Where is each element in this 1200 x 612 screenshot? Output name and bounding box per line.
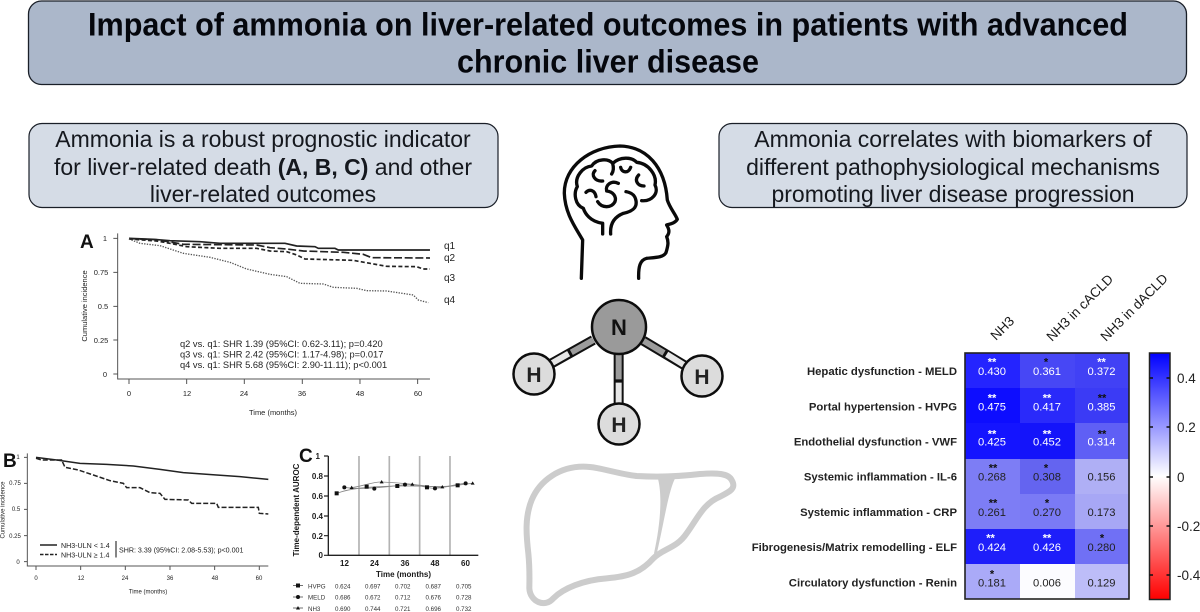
chart C axis labels: 0: [319, 551, 324, 560]
heatmap significance stars: **: [988, 356, 997, 368]
left subtitle box: [29, 124, 498, 208]
chart B tick labels: Time (months): [129, 590, 167, 596]
heatmap values: 0.430: [978, 366, 1006, 378]
hydrogen atom bottom: [598, 404, 640, 444]
left subtitle box: Ammonia is a robust prognostic indicator: [55, 126, 471, 152]
heatmap values: 0.314: [1088, 436, 1116, 448]
left subtitle box: liver-related outcomes: [150, 181, 376, 207]
heatmap significance stars: **: [986, 532, 995, 544]
chart B tick labels: 1: [16, 455, 20, 461]
heatmap row labels: Systemic inflammation - CRP: [800, 507, 957, 519]
panel letter B: B: [3, 451, 17, 472]
chart C axis labels: Time-dependent AUROC: [292, 463, 301, 556]
heatmap significance stars: [986, 356, 1107, 580]
chart C axis labels: Time (months): [376, 570, 431, 579]
right subtitle box: promoting liver disease progression: [771, 181, 1135, 207]
heatmap significance stars: *: [1045, 498, 1050, 510]
chart C data table: HVPG: [308, 584, 326, 590]
chart A tick labels: 60: [414, 389, 422, 398]
heatmap significance stars: *: [1100, 532, 1105, 544]
chart C data table: 0.712: [395, 594, 411, 602]
colour scale legend: 0.2: [1177, 420, 1196, 435]
chart A quartile labels: q2: [444, 253, 456, 264]
heatmap column headers: NH3 in cACLD: [1044, 271, 1116, 344]
heatmap significance stars: **: [1043, 428, 1052, 440]
heatmap values: 0.372: [1088, 366, 1116, 378]
chart A tick labels: 1: [103, 234, 107, 243]
chart C axes and time separators: [324, 456, 478, 555]
chart C axis labels: [292, 452, 470, 579]
heatmap values: 0.006: [1033, 578, 1061, 590]
colour scale legend: -0.2: [1177, 519, 1200, 534]
chart C axis labels: 24: [370, 559, 379, 568]
chart B legend: [40, 541, 243, 560]
chart B axes: [24, 453, 268, 570]
chart A tick labels: [80, 234, 422, 417]
chart B tick labels: 0.75: [9, 481, 21, 487]
chart A tick labels: Time (months): [249, 408, 298, 417]
chart B tick labels: 60: [256, 576, 263, 582]
heatmap values: [978, 366, 1116, 590]
heatmap row labels: Endothelial dysfunction - VWF: [794, 436, 957, 448]
chart A hazard ratios: q4 vs. q1: SHR 5.68 (95%CI: 2.90-11.11); p<0.001: [180, 360, 387, 370]
chart A tick labels: 24: [240, 389, 248, 398]
right subtitle box: different pathophysiological mechanisms: [746, 154, 1160, 180]
heatmap row labels: Hepatic dysfunction - MELD: [807, 366, 957, 378]
chart C axis labels: 0.4: [312, 512, 324, 521]
heatmap column headers: NH3 in dACLD: [1098, 271, 1171, 344]
chart B tick labels: 36: [167, 576, 174, 582]
heatmap values: 0.280: [1088, 542, 1116, 554]
chart B tick labels: 0.25: [9, 534, 21, 540]
heatmap row labels: Fibrogenesis/Matrix remodelling - ELF: [752, 542, 957, 554]
chart C data table: 0.676: [426, 594, 442, 602]
title banner: [28, 1, 1186, 84]
molecule bonds: [552, 340, 684, 404]
heatmap row labels: Circulatory dysfunction - Renin: [789, 577, 957, 589]
heatmap values: 0.129: [1088, 578, 1116, 590]
chart C axis labels: 0.8: [312, 472, 324, 481]
heatmap significance stars: **: [989, 462, 998, 474]
heatmap row labels: Systemic inflammation - IL-6: [804, 472, 957, 484]
chart A tick labels: Cumulative incidence: [80, 270, 89, 342]
right subtitle box: [719, 124, 1187, 208]
heatmap values: 0.426: [1033, 542, 1061, 554]
heatmap border: [965, 353, 1129, 599]
chart A tick labels: 0: [103, 370, 107, 379]
chart A hazard ratios: q3 vs. q1: SHR 2.42 (95%CI: 1.17-4.98); p=0.017: [180, 350, 383, 360]
chart B tick labels: 24: [122, 576, 129, 582]
chart A tick labels: 36: [298, 389, 306, 398]
heatmap significance stars: **: [1043, 392, 1052, 404]
panel letter C: C: [299, 446, 313, 467]
chart C axis labels: 60: [461, 559, 470, 568]
hydrogen atom right: [682, 356, 722, 396]
chart C axis labels: 0.6: [312, 492, 324, 501]
heatmap: ammonia correlations: [752, 271, 1171, 599]
chart C data table: 0.672: [365, 594, 381, 602]
colour scale legend: 0.4: [1177, 371, 1196, 386]
icon: liver outline: [527, 467, 733, 603]
heatmap cells: [965, 353, 1129, 599]
heatmap values: 0.270: [1033, 507, 1061, 519]
chart B legend: SHR: 3.39 (95%CI: 2.08-5.53); p<0.001: [119, 546, 243, 554]
heatmap significance stars: **: [1097, 356, 1106, 368]
heatmap values: 0.385: [1088, 402, 1116, 414]
chart B tick labels: 0.5: [12, 507, 21, 513]
panel letter A: A: [80, 232, 94, 253]
hydrogen atom right: H: [694, 366, 710, 389]
chart A quartile labels: [444, 241, 456, 306]
chart A tick labels: 12: [183, 389, 191, 398]
heatmap significance stars: *: [1044, 462, 1049, 474]
heatmap significance stars: *: [1044, 356, 1049, 368]
chart B tick labels: 0: [16, 560, 20, 566]
nitrogen atom: N: [611, 315, 627, 340]
chart A quartile labels: q3: [444, 273, 456, 284]
chart C data table: 0.702: [395, 584, 411, 590]
left subtitle box: for liver-related death (A, B, C) and other: [54, 154, 472, 180]
chart B tick labels: 0: [34, 576, 38, 582]
chart C data table: 0.686: [335, 594, 351, 602]
chart B tick labels: Cumulative incidence: [0, 481, 6, 539]
chart B tick labels: 48: [212, 576, 219, 582]
heatmap values: 0.475: [978, 402, 1006, 414]
colour scale legend: -0.4: [1177, 568, 1200, 583]
heatmap values: 0.308: [1033, 472, 1061, 484]
chart C axis labels: 0.2: [312, 532, 324, 541]
icon: head with brain: [564, 146, 677, 278]
heatmap column headers: [988, 271, 1171, 344]
chart A: cumulative incidence by ammonia quartile: [80, 232, 456, 417]
heatmap values: 0.452: [1033, 436, 1061, 448]
chart A survival curves: [129, 238, 430, 303]
chart C axis labels: 36: [401, 559, 410, 568]
title banner: Impact of ammonia on liver-related outcomes in patients with advanced: [88, 6, 1128, 42]
heatmap values: 0.424: [978, 542, 1006, 554]
title banner: chronic liver disease: [457, 44, 759, 80]
chart A axes: [113, 233, 430, 384]
hydrogen atom left: H: [526, 364, 542, 387]
chart A tick labels: 0.75: [94, 268, 108, 277]
heatmap values: 0.181: [978, 578, 1006, 590]
heatmap values: 0.417: [1033, 402, 1061, 414]
chart A tick labels: 0.5: [98, 302, 108, 311]
chart C data table: MELD: [308, 594, 326, 602]
chart C data table: [293, 584, 472, 612]
chart C data table: 0.728: [456, 594, 472, 602]
chart B curves: [36, 457, 268, 514]
heatmap values: 0.425: [978, 436, 1006, 448]
chart C data table: 0.705: [456, 584, 472, 590]
heatmap values: 0.173: [1088, 507, 1116, 519]
nitrogen atom: [592, 300, 646, 354]
hydrogen atom left: [514, 354, 554, 394]
chart A hazard ratios: q2 vs. q1: SHR 1.39 (95%CI: 0.62-3.11); p=0.420: [180, 339, 383, 349]
heatmap values: 0.361: [1033, 366, 1061, 378]
chart A tick labels: 48: [356, 389, 364, 398]
heatmap significance stars: *: [990, 568, 995, 580]
heatmap significance stars: **: [989, 498, 998, 510]
chart B: cumulative incidence by NH3-ULN: [0, 451, 268, 596]
chart C data table: 0.697: [365, 584, 381, 590]
chart C: time-dependent AUROC: [292, 446, 478, 612]
heatmap values: 0.261: [978, 507, 1006, 519]
chart A tick labels: 0: [127, 389, 131, 398]
chart A hazard ratios: [180, 339, 387, 370]
chart C axis labels: 12: [340, 559, 349, 568]
heatmap values: 0.156: [1088, 472, 1116, 484]
heatmap significance stars: **: [1043, 532, 1052, 544]
heatmap row labels: Portal hypertension - HVPG: [809, 401, 957, 413]
colour scale legend: [1150, 353, 1200, 600]
chart C data table: 0.687: [426, 584, 442, 590]
colour scale legend: 0: [1177, 470, 1185, 485]
heatmap significance stars: **: [1098, 392, 1107, 404]
right subtitle box: Ammonia correlates with biomarkers of: [754, 126, 1152, 152]
chart B tick labels: 12: [78, 576, 85, 582]
chart C series lines and markers: [335, 480, 475, 495]
heatmap significance stars: **: [1098, 428, 1107, 440]
heatmap row labels: [752, 366, 957, 589]
chart A quartile labels: q4: [444, 295, 456, 306]
chart A quartile labels: q1: [444, 241, 456, 252]
icon: ammonia molecule: [514, 300, 722, 444]
chart B legend: NH3-ULN < 1.4: [61, 542, 110, 550]
chart C axis labels: 48: [431, 559, 440, 568]
hydrogen atom bottom: H: [611, 414, 627, 437]
chart A tick labels: 0.25: [94, 336, 108, 345]
chart C axis labels: 1: [316, 452, 321, 461]
chart B legend: NH3-ULN ≥ 1.4: [61, 552, 109, 560]
chart C data table: 0.624: [335, 584, 351, 590]
chart B tick labels: [0, 455, 263, 596]
heatmap values: 0.268: [978, 472, 1006, 484]
heatmap column headers: NH3: [988, 313, 1017, 343]
heatmap significance stars: **: [988, 428, 997, 440]
heatmap significance stars: **: [988, 392, 997, 404]
